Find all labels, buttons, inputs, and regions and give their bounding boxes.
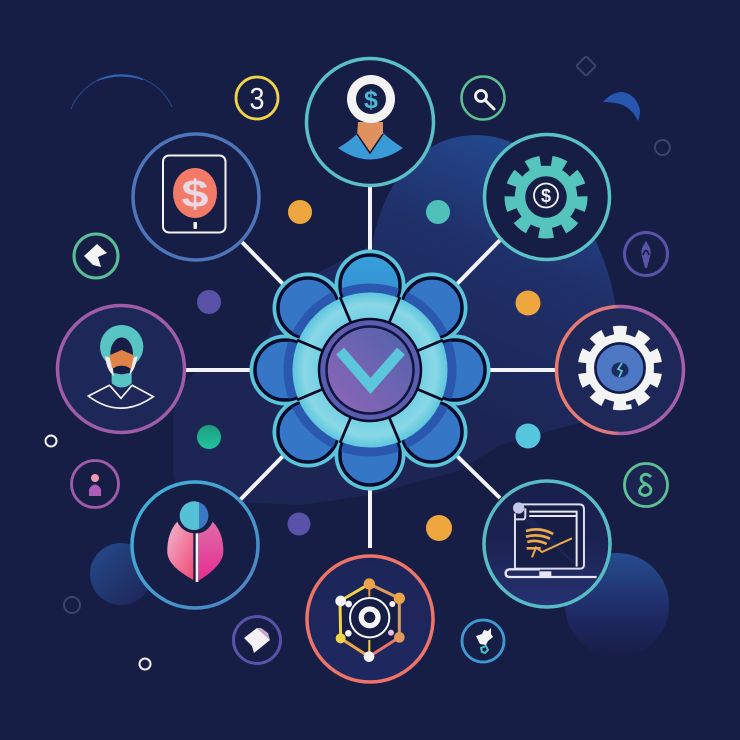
center bar — [196, 533, 198, 582]
node: top person with dollar — [306, 58, 434, 186]
chevron — [344, 355, 398, 386]
hood — [100, 325, 143, 368]
dollar coin — [534, 184, 558, 208]
tablet — [163, 156, 226, 232]
badge: green arrow — [74, 234, 118, 278]
darker band — [284, 284, 456, 456]
badge: number 3: 3 — [250, 81, 264, 116]
hub medallion — [319, 319, 421, 421]
shield left — [167, 522, 193, 580]
shoulders — [338, 133, 403, 160]
decorative ring: bottom left — [64, 597, 80, 613]
inner fill — [341, 585, 398, 655]
light disc — [292, 292, 448, 448]
gear — [590, 338, 650, 398]
background ball: bottom left — [90, 543, 152, 605]
spokes — [297, 297, 443, 443]
badge: blue splash — [462, 620, 504, 662]
background blob: central — [173, 135, 617, 505]
mask — [109, 350, 134, 368]
node: laptop — [484, 481, 610, 607]
shield right — [199, 522, 223, 581]
badge: number 3 — [236, 77, 278, 119]
coin head — [347, 75, 395, 123]
scroll curl — [513, 502, 524, 514]
node: teal gear with dollar — [484, 134, 610, 260]
ear pieces — [105, 356, 114, 376]
node: teal gear with dollar: $ — [541, 186, 551, 206]
decorative ring: white bottom — [140, 658, 150, 670]
node: white gear — [556, 306, 684, 434]
decorative ring: top right — [655, 140, 670, 155]
neck — [357, 122, 383, 153]
center rings — [350, 598, 389, 637]
node: hexagon network — [307, 556, 433, 682]
decorative ring: white left — [46, 436, 56, 446]
gear — [520, 171, 572, 223]
shoulders — [88, 385, 153, 408]
badge: green S — [624, 464, 668, 506]
background ball: bottom right — [565, 553, 669, 657]
glyph — [612, 362, 628, 378]
petals: teal outer — [250, 250, 490, 490]
node: tablet with dollar — [133, 134, 259, 260]
laptop screen — [514, 504, 584, 569]
signal and check — [526, 529, 553, 548]
badge: purple pin — [624, 232, 668, 276]
hexagon links — [340, 584, 369, 601]
node: tablet with dollar: $ — [182, 173, 209, 216]
connector lines — [186, 186, 556, 548]
petals: blue with black outline — [255, 255, 485, 485]
neck — [112, 373, 132, 387]
nodes — [335, 578, 405, 662]
decorative arc: top left — [71, 75, 172, 109]
head — [177, 499, 211, 533]
coin — [173, 168, 217, 218]
badge: magnifier — [462, 76, 504, 120]
dots — [197, 200, 540, 541]
node: top person with dollar: $ — [364, 86, 378, 114]
badge: purple person — [72, 460, 118, 508]
central flower hub — [250, 250, 490, 490]
badge: purple speech diamond — [234, 616, 280, 664]
laptop base — [506, 569, 597, 577]
node: person with mask — [58, 306, 184, 432]
decorative diamond — [576, 56, 596, 76]
node: shield icon — [132, 482, 258, 608]
decorative crescent: top right — [603, 92, 640, 121]
